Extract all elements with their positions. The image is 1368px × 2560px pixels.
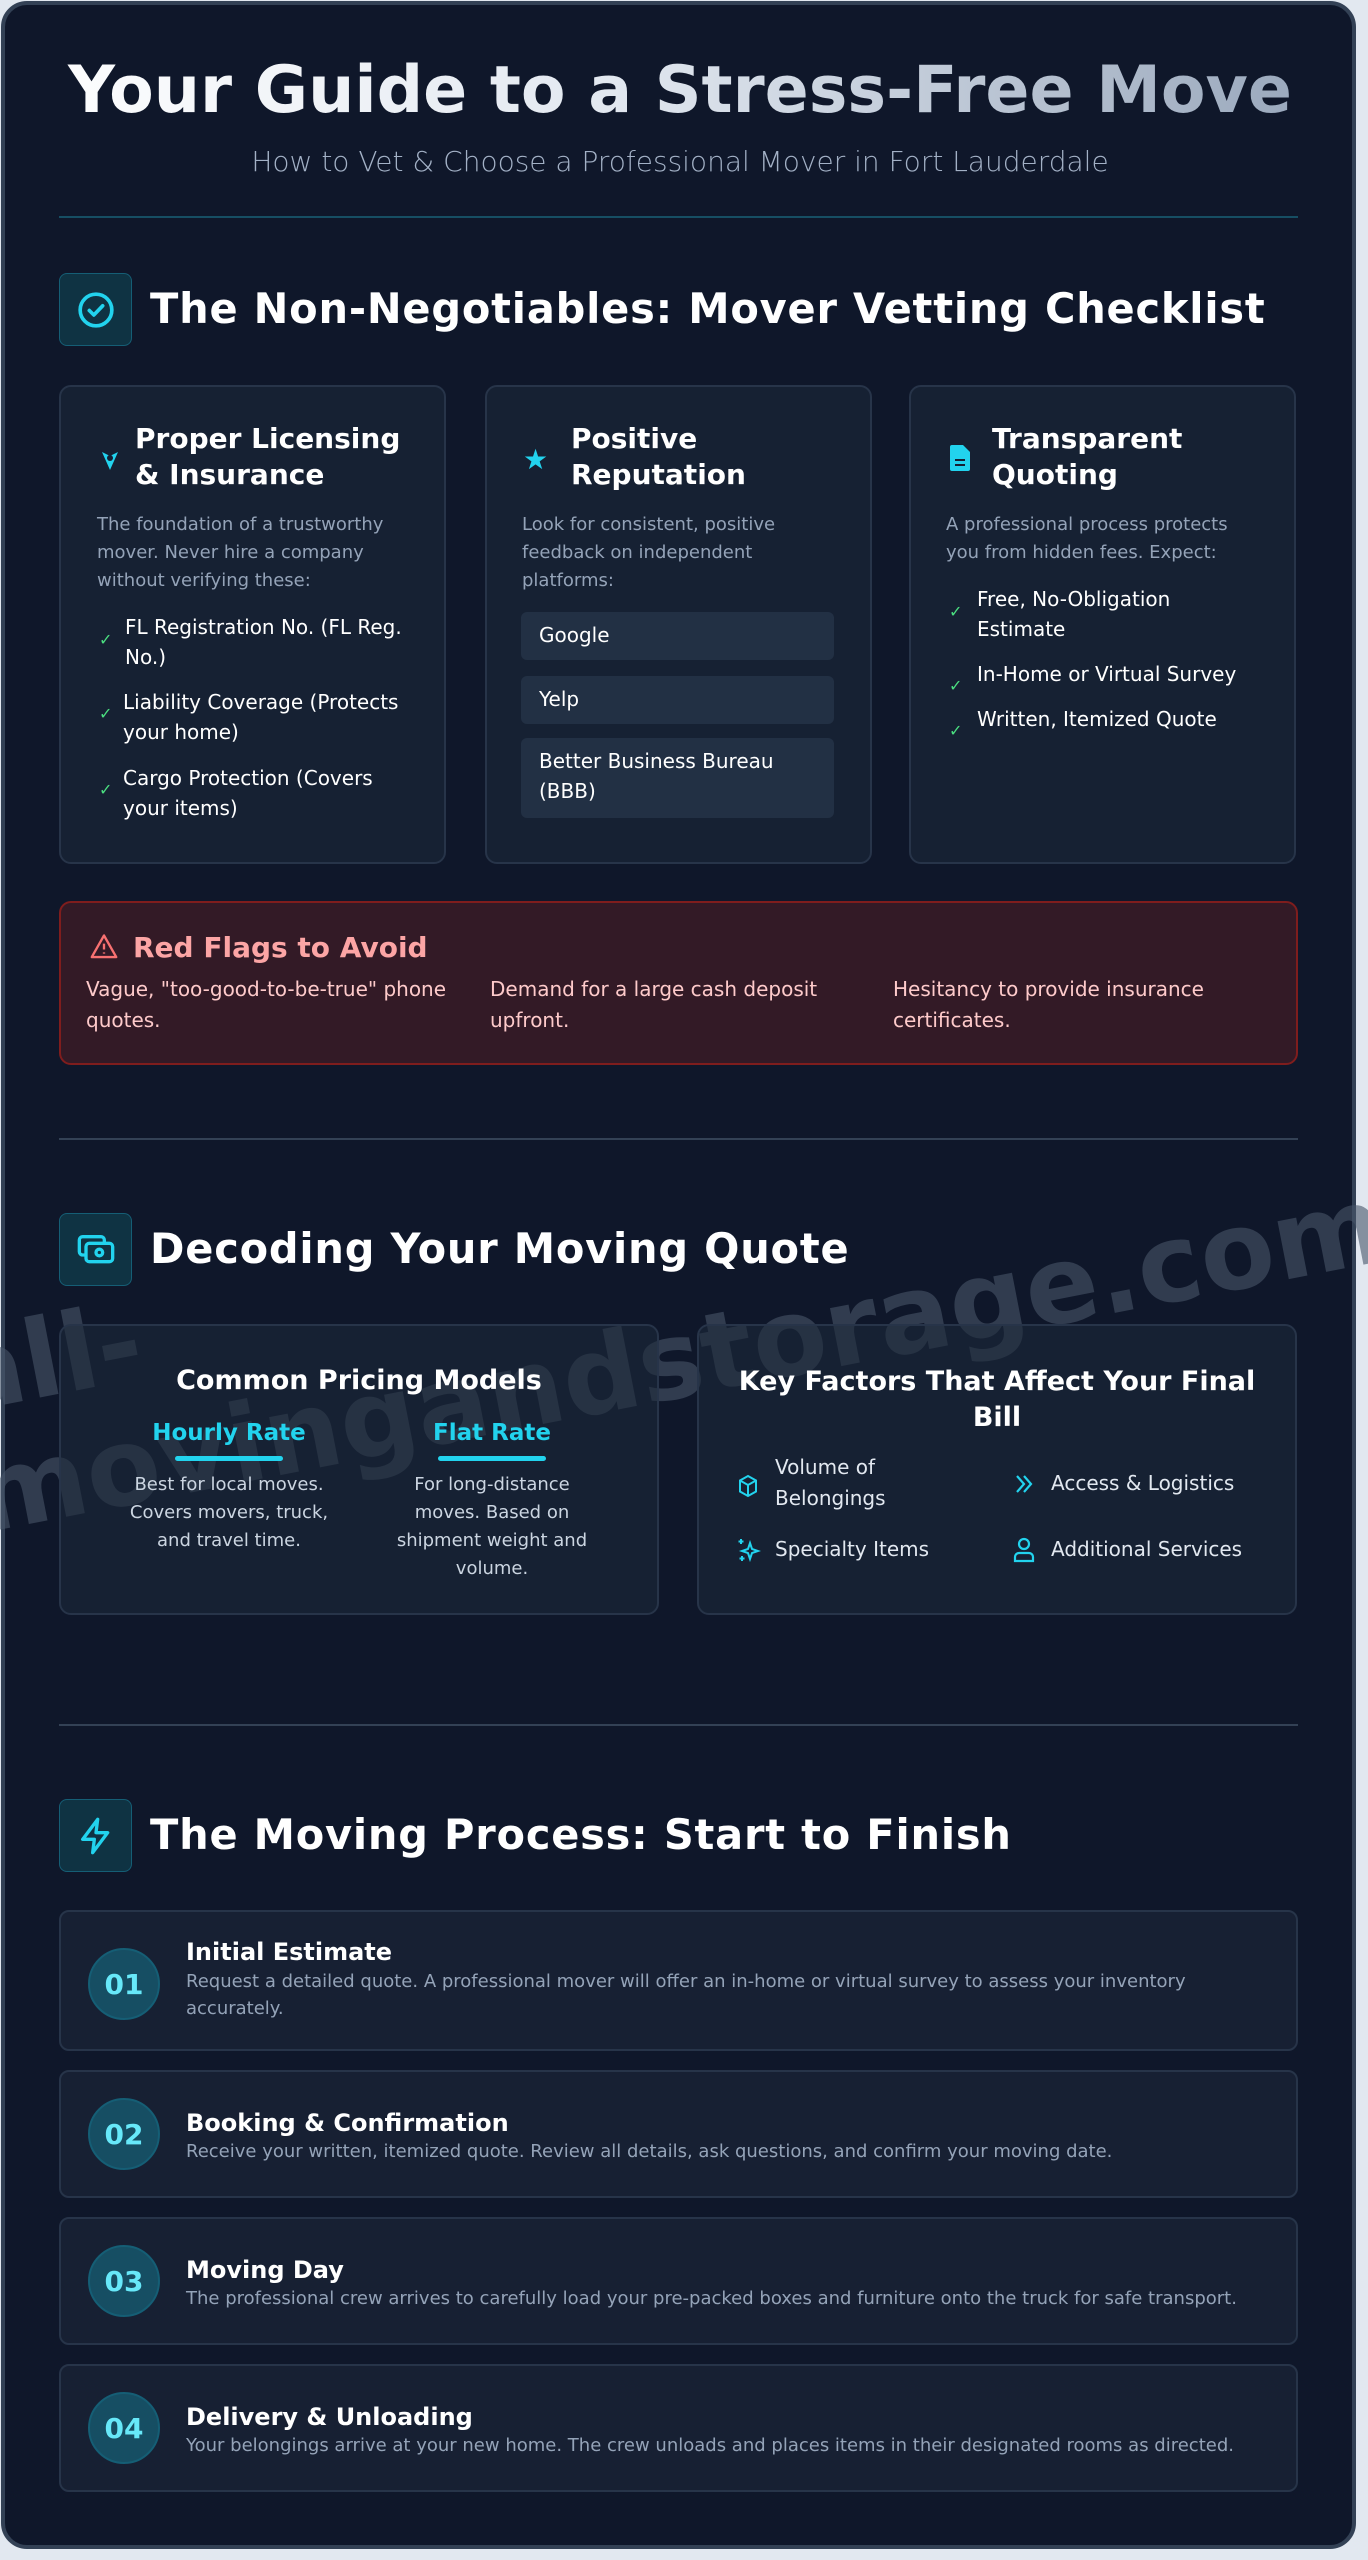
section heading: process: The Moving Process: Start to Finish: [150, 1810, 1012, 1859]
factor: volume: Volume of Belongings: [775, 1455, 886, 1510]
panel: reputation: [485, 385, 872, 864]
step 3: 03: [105, 2264, 143, 2298]
card title: Proper Licensing: [135, 422, 400, 455]
description: The foundation of a trustworthy mover. Never hire a company without verifying these:: [97, 514, 383, 591]
flat rate: For long-distance moves. Based on shipment weight and volume.: [397, 1474, 587, 1579]
icon: badge: [102, 452, 118, 470]
checklist items: [949, 587, 1236, 740]
checklist items: FL Registration No. (FL Reg. No.): [125, 615, 402, 669]
title: Your Guide to a Stress-Free Move: [68, 53, 1292, 128]
panel: key factors: [697, 1324, 1297, 1615]
platform pills: [521, 612, 834, 818]
checklist items: Free, No-Obligation Estimate: [977, 587, 1170, 641]
checklist items: ✓: [949, 721, 962, 740]
step 1: [59, 1910, 1298, 2051]
panel title: Common Pricing Models: [176, 1365, 542, 1396]
card title: Reputation: [571, 458, 746, 491]
icon: document: [950, 445, 970, 471]
panel: licensing: [59, 385, 446, 864]
flat rate: [397, 1420, 587, 1579]
card title: [135, 422, 400, 491]
section icon: checklist: [59, 273, 132, 346]
flat rate: Flat Rate: [433, 1420, 551, 1446]
step 1: Initial Estimate: [186, 1938, 392, 1966]
platform pills: Yelp: [539, 687, 579, 711]
panel: quoting: [909, 385, 1296, 864]
hourly rate: [130, 1420, 328, 1551]
icon: warning: [90, 934, 118, 958]
step 2: 02: [105, 2118, 143, 2150]
red flag items: Vague, "too-good-to-be-true" phone quotes.: [86, 977, 446, 1032]
checklist items: [99, 615, 402, 820]
step 4: 04: [105, 2412, 143, 2444]
card title: & Insurance: [135, 458, 324, 491]
checklist items: Written, Itemized Quote: [977, 707, 1217, 731]
step 1: 01: [105, 1968, 143, 2000]
panel title: Key Factors That Affect Your Final Bill: [739, 1366, 1255, 1433]
section icon: quote: [59, 1213, 132, 1286]
section icon: process: [59, 1799, 132, 1872]
callout: red flags: [59, 901, 1298, 1065]
step 2: Receive your written, itemized quote. Review all details, ask questions, and confirm your moving date.: [186, 2141, 1112, 2162]
description: A professional process protects you from hidden fees. Expect:: [946, 514, 1228, 563]
icon: star: ★: [523, 443, 548, 476]
description: Look for consistent, positive feedback on independent platforms:: [522, 514, 775, 591]
checklist items: ✓: [99, 780, 112, 799]
step 2: Booking & Confirmation: [186, 2109, 509, 2137]
step 3: The professional crew arrives to carefully load your pre-packed boxes and furniture onto the truck for safe transport.: [186, 2288, 1237, 2309]
step 4: [59, 2364, 1298, 2492]
card title: Quoting: [992, 458, 1118, 491]
factor: specialty: Specialty Items: [775, 1537, 929, 1561]
checklist items: Cargo Protection (Covers your items): [123, 766, 373, 820]
platform pills: Better Business Bureau (BBB): [539, 749, 774, 803]
card title: Positive: [571, 422, 697, 455]
panel: pricing models: [59, 1324, 659, 1615]
checklist items: ✓: [99, 704, 112, 723]
step 2: [59, 2070, 1298, 2198]
checklist items: ✓: [99, 630, 112, 649]
card title: Transparent: [992, 422, 1182, 455]
step 3: Moving Day: [186, 2256, 344, 2284]
card title: [571, 422, 746, 491]
hourly rate: Best for local moves. Covers movers, truck, and travel time.: [130, 1474, 328, 1551]
subtitle: How to Vet & Choose a Professional Mover in Fort Lauderdale: [251, 145, 1109, 178]
checklist items: In-Home or Virtual Survey: [977, 662, 1236, 686]
red flag items: Demand for a large cash deposit upfront.: [490, 977, 817, 1032]
checklist items: ✓: [949, 602, 962, 621]
section heading: checklist: The Non-Negotiables: Mover Vetting Checklist: [150, 284, 1266, 333]
red flag items: [86, 977, 1204, 1032]
checklist items: ✓: [949, 676, 962, 695]
factor: access: Access & Logistics: [1051, 1471, 1234, 1495]
factor: additional: Additional Services: [1051, 1537, 1242, 1561]
step 4: Delivery & Unloading: [186, 2403, 473, 2431]
platform pills: Google: [539, 623, 610, 647]
hourly rate: Hourly Rate: [152, 1420, 306, 1446]
card title: [992, 422, 1182, 491]
step 1: Request a detailed quote. A professional mover will offer an in-home or virtual survey to assess your inventory accurately.: [186, 1971, 1186, 2019]
step 3: [59, 2217, 1298, 2345]
step 4: Your belongings arrive at your new home. The crew unloads and places items in their designated rooms as directed.: [186, 2435, 1234, 2456]
callout title: Red Flags to Avoid: [133, 931, 428, 964]
section heading: quote: Decoding Your Moving Quote: [150, 1224, 849, 1273]
checklist items: Liability Coverage (Protects your home): [123, 690, 398, 744]
red flag items: Hesitancy to provide insurance certificates.: [893, 977, 1204, 1032]
